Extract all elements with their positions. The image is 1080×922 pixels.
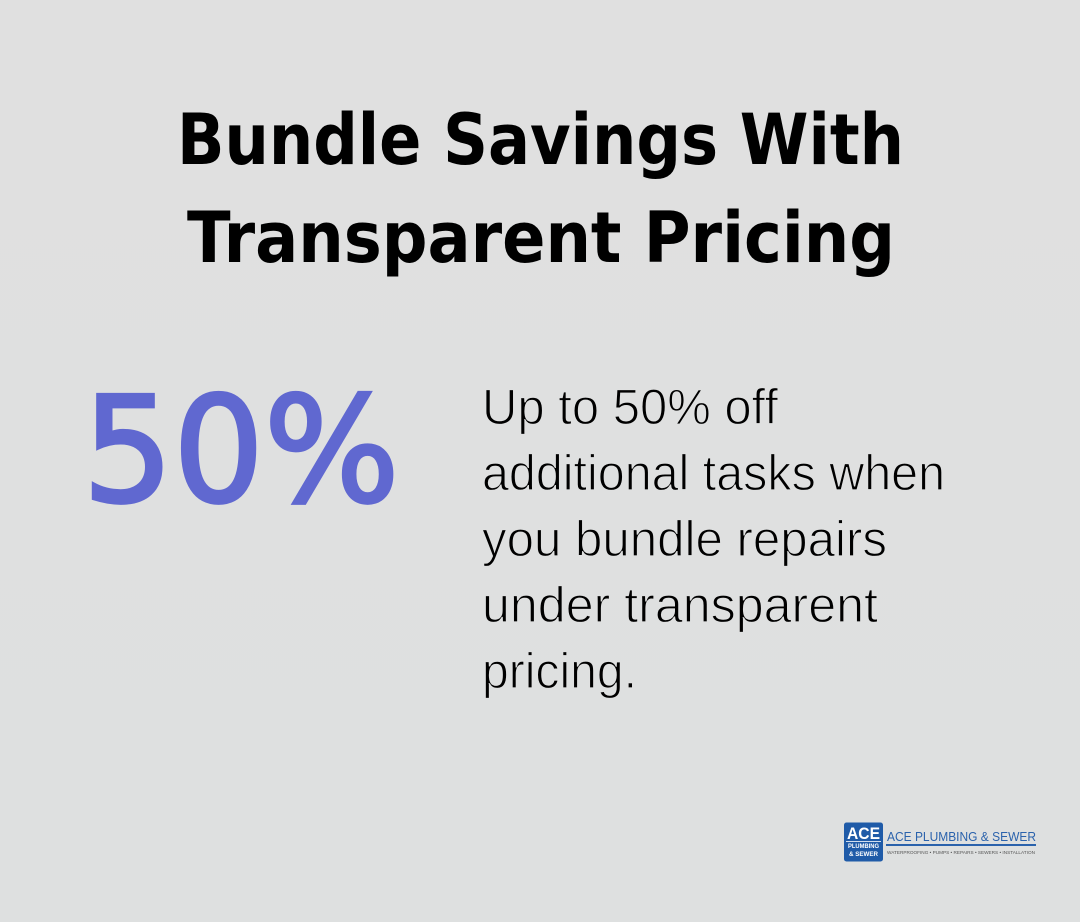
big stat: 50%: 50% xyxy=(82,366,400,536)
stat description: you bundle repairs xyxy=(482,511,887,567)
logo badge: & SEWER xyxy=(849,851,878,858)
logo badge xyxy=(844,822,883,862)
title: Transparent Pricing xyxy=(187,197,895,279)
logo: Ace Plumbing & Sewer xyxy=(844,822,1036,862)
stat description: pricing. xyxy=(482,643,637,699)
logo wordmark: ACE PLUMBING & SEWER xyxy=(887,829,1036,844)
logo tagline: WATERPROOFING • PUMPS • REPAIRS • SEWERS • INSTALLATION xyxy=(887,850,1035,855)
logo badge: ACE xyxy=(847,825,880,843)
title: Bundle Savings With xyxy=(177,99,904,181)
title xyxy=(177,99,904,279)
stat description: Up to 50% off xyxy=(482,379,778,435)
stat description: additional tasks when xyxy=(482,445,945,501)
stat description xyxy=(482,379,945,699)
logo badge: PLUMBING xyxy=(848,843,879,850)
stat description: under transparent xyxy=(482,577,878,633)
